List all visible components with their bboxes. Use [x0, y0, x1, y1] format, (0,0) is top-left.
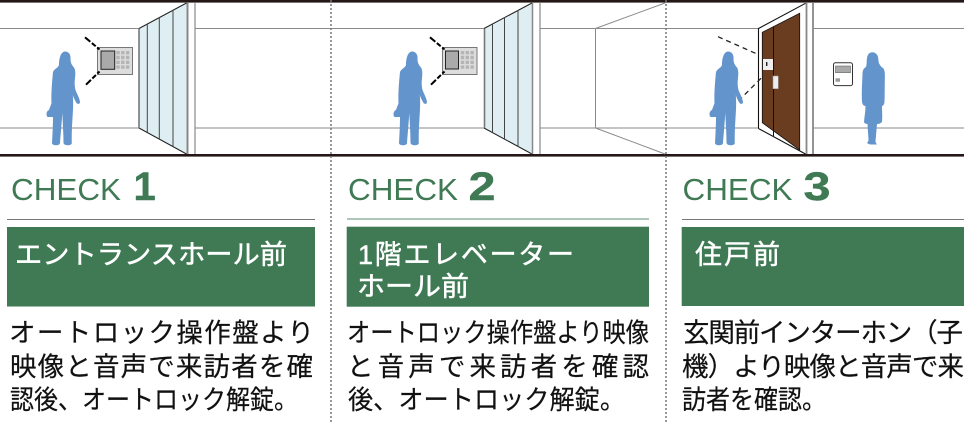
check 1 heading: 1	[134, 165, 156, 209]
description: と音声で来訪者を確認	[347, 352, 649, 382]
panel: check 2 illustration	[394, 3, 665, 154]
description: 後、オートロック解錠。	[348, 385, 625, 415]
green title band: ホール前	[357, 272, 469, 302]
description: 認後、オートロック解錠。	[10, 385, 298, 415]
green title band: エントランスホール前	[15, 240, 287, 270]
green title band: 1階エレベーター	[358, 240, 574, 270]
description: オートロック操作盤より映像	[347, 318, 649, 348]
glass entrance door	[139, 3, 195, 154]
check 1 heading: CHECK	[11, 173, 121, 207]
check 3 heading	[682, 165, 830, 209]
check 3 heading: 3	[804, 165, 830, 209]
panel: check 3 illustration	[710, 3, 885, 154]
camera view dashed lines	[718, 37, 761, 103]
icon: visitor silhouette	[394, 52, 427, 145]
description: 玄関前インターホン（子	[683, 318, 963, 348]
icon: auto-lock panel	[430, 37, 477, 85]
description	[682, 318, 964, 415]
icon: visitor silhouette	[47, 52, 80, 145]
check 2 heading: 2	[468, 165, 496, 209]
green title band	[347, 227, 649, 307]
green title band: 住戸前	[695, 240, 780, 270]
check 2 heading	[348, 165, 496, 209]
description: 機）より映像と音声で来	[682, 352, 964, 382]
panel: check 1 text	[7, 165, 315, 415]
icon: visitor silhouette	[710, 52, 743, 145]
check 1 heading	[11, 165, 156, 209]
panel: check 2 text	[347, 165, 649, 415]
entrance door	[758, 3, 813, 154]
icon: auto-lock panel	[85, 37, 132, 85]
description: 映像と音声で来訪者を確	[10, 352, 313, 382]
check 3 heading: CHECK	[682, 173, 792, 207]
elevator hall corridor	[596, 3, 665, 154]
green title band	[7, 227, 315, 306]
panel: check 1 illustration	[47, 3, 195, 154]
panel: check 3 text	[682, 165, 964, 415]
description: オートロック操作盤より	[9, 318, 314, 348]
green title band	[682, 227, 964, 306]
glass entrance door	[484, 3, 540, 154]
description: 訪者を確認。	[682, 385, 826, 415]
description	[347, 318, 649, 415]
icon: resident silhouette	[862, 52, 885, 144]
check 2 heading: CHECK	[348, 173, 458, 207]
description	[9, 318, 314, 415]
icon: indoor intercom	[834, 63, 852, 86]
